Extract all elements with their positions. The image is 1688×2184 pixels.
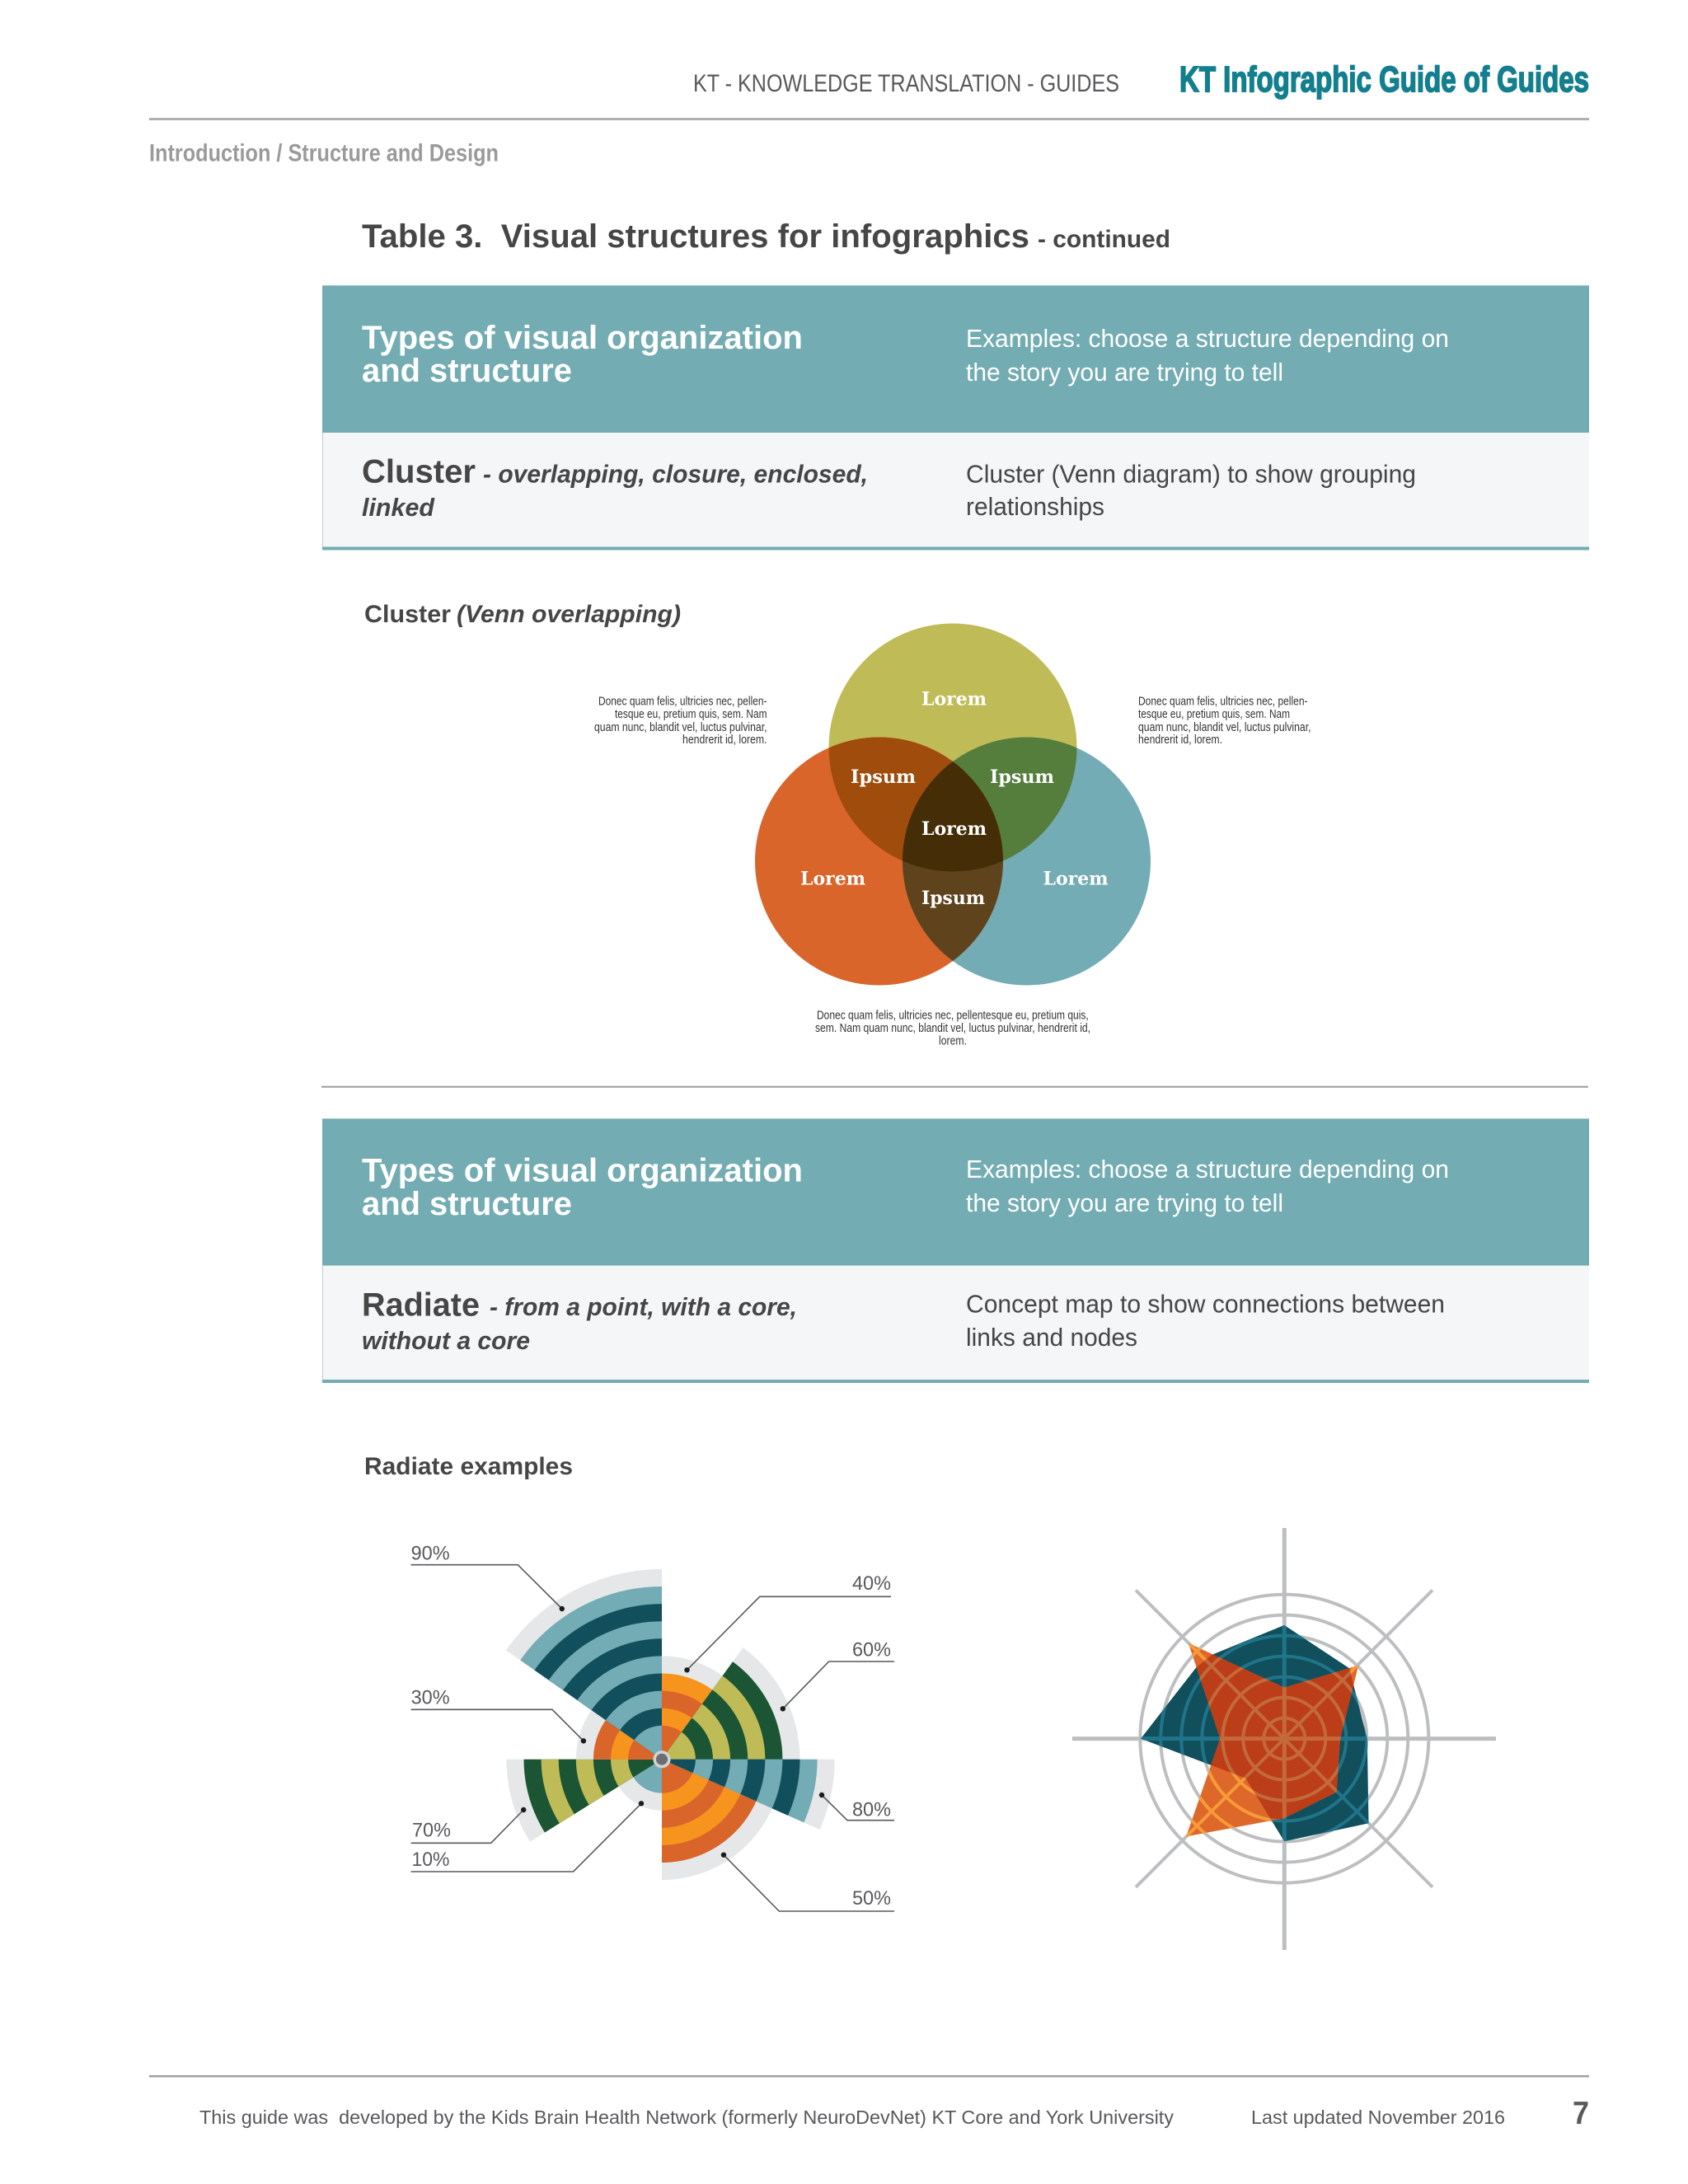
chart: venn diagram: Lorem bbox=[800, 869, 865, 890]
text: venn left note: tesque eu, pretium quis, sem. Nam bbox=[615, 708, 767, 721]
slice: 50% bbox=[662, 1763, 772, 1880]
text: venn right note bbox=[1138, 696, 1311, 747]
text: venn bottom note: sem. Nam quam nunc, blandit vel, luctus pulvinar, hendrerit id, bbox=[815, 1022, 1090, 1035]
heading: types of visual organization bbox=[362, 320, 803, 389]
text: examples: Examples: choose a structure depending on bbox=[966, 1155, 1449, 1183]
callout: 50% bbox=[721, 1853, 894, 1911]
callout: 50%: 50% bbox=[852, 1887, 891, 1910]
footer credit: This guide was developed by the Kids Brain Health Network (formerly NeuroDevNet) KT Core and York University bbox=[199, 2107, 1175, 2128]
row heading: cluster: linked bbox=[362, 493, 435, 522]
text: venn bottom note: Donec quam felis, ultricies nec, pellentesque eu, pretium quis, bbox=[817, 1010, 1089, 1023]
chart: radar bbox=[1072, 1528, 1496, 1950]
table header band bbox=[322, 285, 1589, 433]
breadcrumb: Introduction / Structure and Design bbox=[149, 140, 499, 166]
slice: 10% bbox=[618, 1764, 662, 1811]
row description: radiate bbox=[966, 1289, 1445, 1352]
row description: radiate: Concept map to show connections between bbox=[966, 1289, 1445, 1319]
panel: radiate table bbox=[322, 1118, 1589, 1383]
table row bottom bar bbox=[322, 547, 1589, 551]
table header band bbox=[322, 1118, 1589, 1266]
footer date: Last updated November 2016 bbox=[1251, 2107, 1505, 2128]
row heading: radiate: Radiate bbox=[362, 1287, 480, 1324]
text: venn left note: quam nunc, blandit vel, luctus pulvinar, bbox=[594, 721, 767, 734]
header rule bbox=[149, 118, 1589, 120]
text: venn left note bbox=[594, 696, 767, 747]
table row background bbox=[322, 1266, 1589, 1380]
page number: 7 bbox=[1573, 2096, 1589, 2131]
table title: Table 3. Visual structures for infographics bbox=[362, 218, 1029, 255]
row heading: cluster: Cluster bbox=[362, 453, 476, 490]
text: venn bottom note bbox=[815, 1010, 1090, 1048]
slice: 80% bbox=[669, 1759, 835, 1830]
callout: 10% bbox=[411, 1801, 644, 1872]
callout: 60% bbox=[781, 1638, 894, 1711]
text: examples bbox=[966, 324, 1449, 387]
callout: 70% bbox=[411, 1807, 526, 1843]
mid rule bbox=[321, 1086, 1588, 1088]
table row background bbox=[322, 433, 1589, 547]
slice: 70% bbox=[506, 1759, 654, 1841]
row heading: cluster bbox=[362, 453, 868, 522]
heading: types of visual organization: and structure bbox=[362, 1186, 572, 1222]
row description: radiate: links and nodes bbox=[966, 1323, 1137, 1352]
table row bottom bar bbox=[322, 1380, 1589, 1383]
text: venn bottom note: lorem. bbox=[939, 1035, 967, 1048]
text: examples: the story you are trying to tell bbox=[966, 1188, 1283, 1217]
callout: 40% bbox=[684, 1572, 891, 1673]
slice: 90% bbox=[506, 1569, 662, 1755]
chart: venn diagram: Ipsum bbox=[921, 888, 985, 909]
text: examples bbox=[966, 1155, 1449, 1217]
header section label: KT - KNOWLEDGE TRANSLATION - GUIDES bbox=[693, 70, 1119, 97]
panel: cluster table bbox=[322, 285, 1589, 551]
chart: venn diagram: Lorem bbox=[921, 689, 987, 710]
text: venn left note: hendrerit id, lorem. bbox=[682, 733, 767, 747]
callout: 90%: 90% bbox=[411, 1543, 450, 1565]
callout: 40%: 40% bbox=[852, 1572, 891, 1595]
heading: types of visual organization bbox=[362, 1152, 803, 1222]
slice: 60% bbox=[667, 1648, 799, 1759]
text: examples: the story you are trying to tell bbox=[966, 358, 1283, 387]
chart: venn diagram: Ipsum bbox=[990, 766, 1054, 788]
text: venn right note: hendrerit id, lorem. bbox=[1138, 733, 1222, 747]
text: venn right note: tesque eu, pretium quis, sem. Nam bbox=[1138, 708, 1290, 721]
row description: cluster: Cluster (Venn diagram) to show grouping bbox=[966, 460, 1416, 488]
heading: cluster venn: (Venn overlapping) bbox=[457, 601, 681, 628]
callout: 60%: 60% bbox=[852, 1638, 891, 1661]
heading: radiate examples: Radiate examples bbox=[364, 1453, 573, 1480]
callout: 80%: 80% bbox=[852, 1798, 891, 1821]
heading: types of visual organization: and structure bbox=[362, 353, 572, 389]
heading: cluster venn: Cluster bbox=[364, 601, 451, 628]
callout: 70%: 70% bbox=[412, 1819, 451, 1841]
table title: - continued bbox=[1038, 226, 1170, 253]
text: venn right note: Donec quam felis, ultricies nec, pellen- bbox=[1138, 696, 1308, 709]
row heading: radiate: - from a point, with a core, bbox=[490, 1292, 797, 1321]
chart: venn diagram: Lorem bbox=[1043, 869, 1108, 890]
slice: 30% bbox=[575, 1711, 654, 1760]
callout: 30%: 30% bbox=[411, 1687, 450, 1709]
chart hub bbox=[653, 1750, 671, 1768]
text: venn right note: quam nunc, blandit vel, luctus pulvinar, bbox=[1138, 721, 1311, 734]
footer rule bbox=[149, 2075, 1589, 2077]
row description: cluster bbox=[966, 460, 1416, 521]
text: venn left note: Donec quam felis, ultricies nec, pellen- bbox=[598, 696, 767, 709]
text: examples: Examples: choose a structure depending on bbox=[966, 324, 1449, 353]
row description: cluster: relationships bbox=[966, 492, 1104, 521]
chart: venn diagram bbox=[755, 623, 1151, 986]
row heading: cluster: - overlapping, closure, enclosed, bbox=[483, 460, 868, 488]
callout: 80% bbox=[819, 1793, 894, 1821]
callout: 90% bbox=[411, 1543, 565, 1611]
chart: venn diagram: Ipsum bbox=[851, 766, 916, 788]
slice: 40% bbox=[662, 1657, 722, 1752]
callout: 10%: 10% bbox=[412, 1849, 450, 1871]
heading: types of visual organization: Types of visual organization bbox=[362, 320, 803, 356]
heading: types of visual organization: Types of visual organization bbox=[362, 1152, 803, 1188]
row heading: radiate: without a core bbox=[362, 1326, 530, 1355]
row heading: radiate bbox=[362, 1287, 797, 1355]
chart: radial segmented pie bbox=[411, 1543, 894, 1950]
chart: venn diagram: Lorem bbox=[921, 818, 987, 840]
callout: 30% bbox=[411, 1687, 586, 1744]
